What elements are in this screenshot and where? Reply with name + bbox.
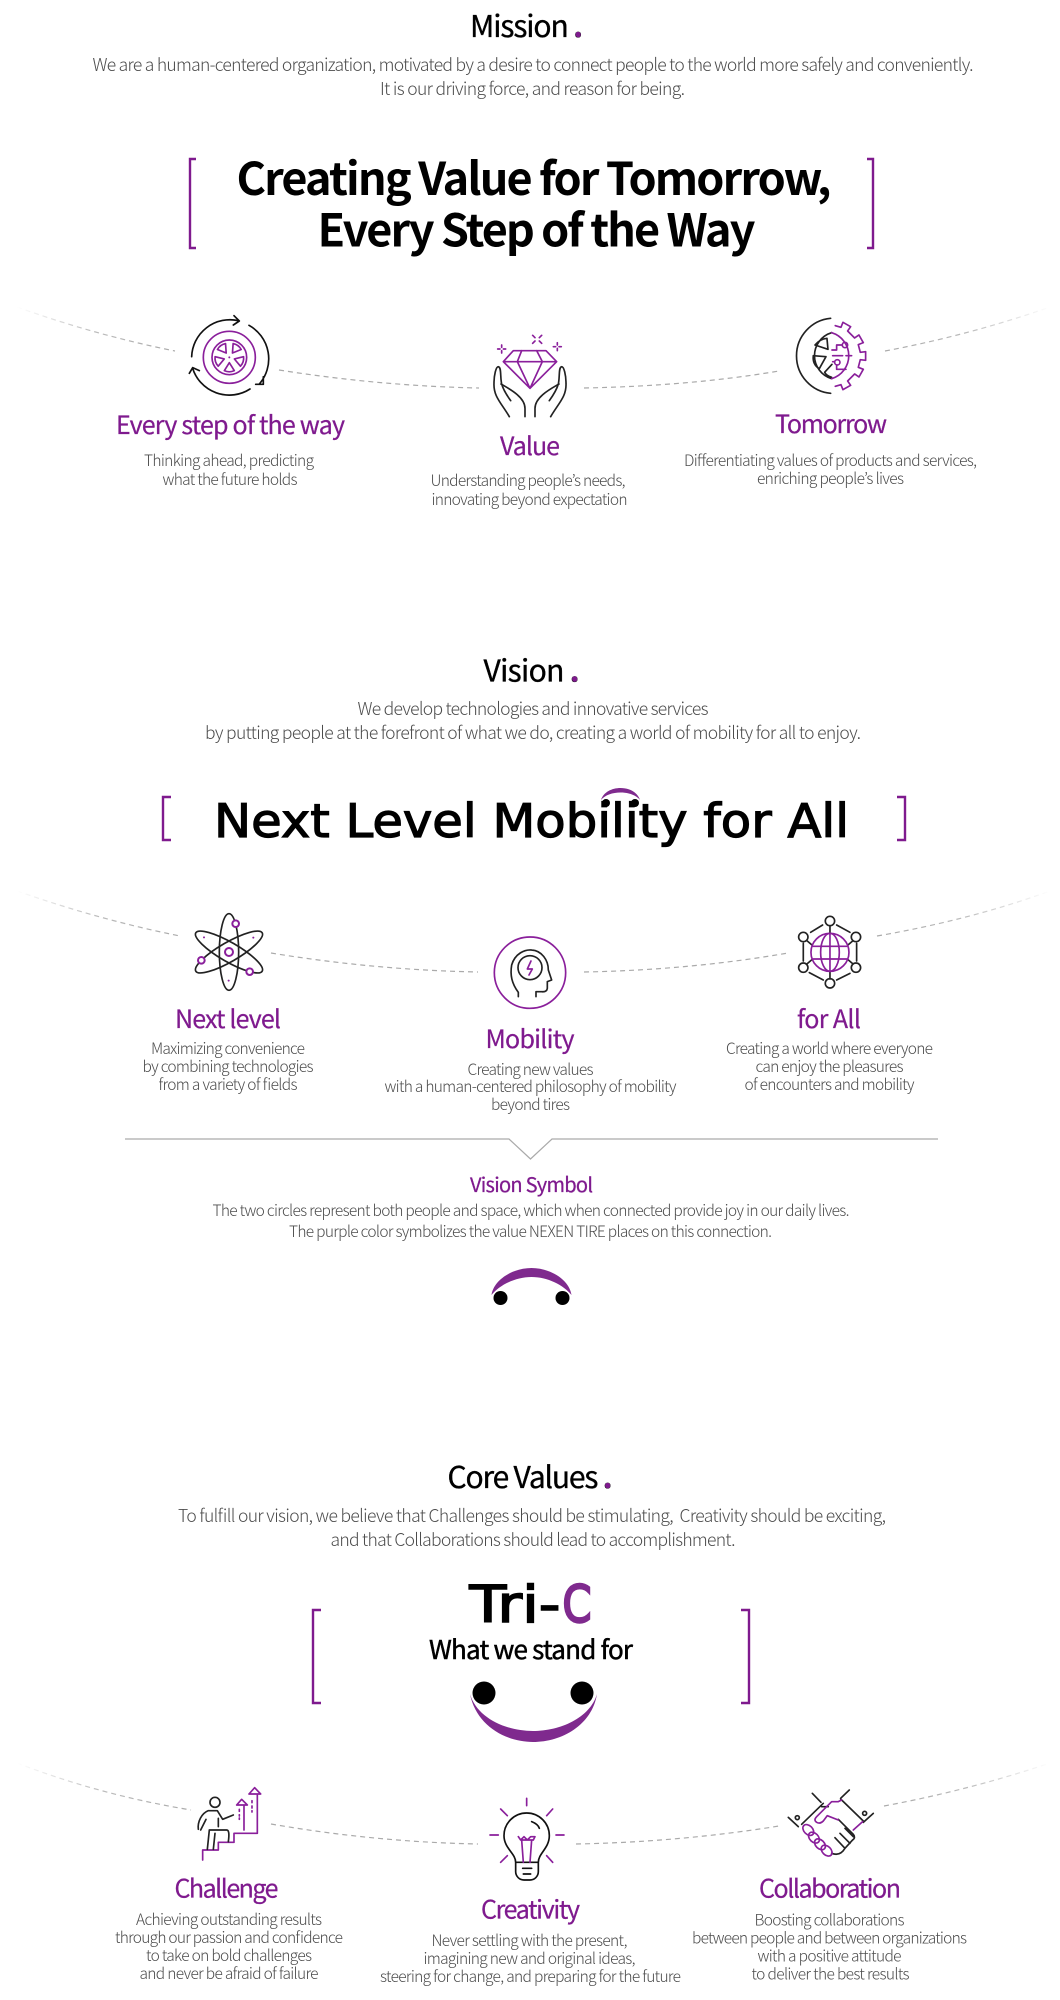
label: challenge: to take on bold challenges — [146, 1944, 312, 1966]
label: challenge — [115, 1870, 343, 1984]
label: challenge: Challenge — [174, 1870, 278, 1906]
bracket: right — [741, 1610, 749, 1703]
bracket: right — [897, 797, 905, 840]
label: tomorrow: Differentiating values of products and services, — [684, 449, 977, 471]
label: value — [430, 427, 628, 510]
label: creativity: steering for change, and preparing for the future — [380, 1965, 681, 1987]
smile symbol — [470, 1682, 597, 1742]
panel: core values — [17, 1453, 1050, 1987]
label: challenge: and never be afraid of failure — [140, 1962, 318, 1984]
label: collaboration: to deliver the best results — [752, 1962, 910, 1984]
label: collaboration: Collaboration — [759, 1870, 901, 1906]
vision statement text — [205, 696, 861, 745]
mission slogan — [236, 143, 832, 260]
label: challenge: through our passion and confidence — [115, 1926, 343, 1948]
label: creativity: Creativity — [481, 1890, 580, 1926]
label: mobility: with a human-centered philosophy of mobility — [384, 1075, 677, 1097]
label: tomorrow: Tomorrow — [775, 405, 887, 441]
icon: light bulb — [490, 1798, 564, 1880]
label: collaboration: between people and between organizations — [692, 1926, 967, 1948]
label: every step of the way: what the future holds — [162, 468, 298, 490]
label: mobility: Mobility — [486, 1020, 574, 1056]
subtitle: what we stand for: What we stand for — [429, 1630, 634, 1667]
label: mobility: beyond tires — [491, 1093, 570, 1115]
bracket: right — [867, 159, 873, 248]
label: collaboration: with a positive attitude — [758, 1944, 902, 1966]
panel: vision — [17, 646, 1050, 1305]
heading: mission: Mission . — [470, 2, 583, 46]
vision symbol text: The two circles represent both people and space, which when connected provide joy in our daily lives. — [212, 1199, 850, 1221]
icon: person climbing stairs — [198, 1788, 261, 1860]
label: collaboration — [692, 1870, 967, 1984]
vision symbol heading: Vision Symbol — [470, 1169, 593, 1198]
Tri-C logo: Tri- — [468, 1576, 560, 1635]
Tri-C logo: C — [562, 1576, 592, 1635]
label: every step of the way: Every step of the way — [116, 406, 345, 442]
icon: tire and gear — [797, 318, 866, 393]
label: every step of the way — [116, 406, 345, 490]
Tri-C logo — [468, 1576, 592, 1635]
vision slogan with symbol: Next Level Mobility for All — [214, 794, 849, 848]
icon: tire with cycle arrows — [189, 316, 269, 395]
core values statement text — [178, 1503, 886, 1552]
bracket: left — [313, 1610, 321, 1703]
label: mobility — [384, 1020, 677, 1115]
icon: globe network — [799, 916, 861, 988]
icon: atom — [191, 914, 267, 990]
label: next level: Next level — [175, 1000, 281, 1036]
icon: head with lightning bolt — [494, 937, 566, 1008]
heading: vision: Vision . — [484, 646, 580, 690]
dashed arc connector — [17, 1763, 1050, 1844]
core values statement text: and that Collaborations should lead to accomplishment. — [330, 1527, 736, 1552]
label: tomorrow: enriching people’s lives — [757, 467, 904, 489]
core values statement text: To fulfill our vision, we believe that Challenges should be stimulating, Creativity should be exciting, — [178, 1503, 886, 1528]
label: tomorrow — [684, 405, 977, 489]
label: next level: Maximizing convenience — [151, 1037, 305, 1059]
label: collaboration: Boosting collaborations — [754, 1908, 904, 1930]
mission slogan: Every Step of the Way — [318, 194, 756, 260]
label: for all: of encounters and mobility — [744, 1073, 915, 1095]
label: value: Understanding people’s needs, — [430, 469, 626, 491]
icon: handshake — [788, 1790, 873, 1858]
label: next level: from a variety of fields — [158, 1073, 298, 1095]
label: creativity: imagining new and original ideas, — [424, 1947, 636, 1969]
vision statement text: We develop technologies and innovative services — [358, 696, 709, 721]
mission statement text: We are a human-centered organization, motivated by a desire to connect people to the world more safely and conveniently. — [92, 52, 974, 77]
label: creativity — [380, 1890, 681, 1987]
label: for all: for All — [797, 1000, 861, 1036]
bracket: left — [163, 797, 171, 840]
label: for all — [726, 1000, 933, 1095]
panel: mission — [17, 2, 1050, 510]
label: challenge: Achieving outstanding results — [136, 1908, 322, 1930]
mission slogan: Creating Value for Tomorrow, — [236, 143, 832, 208]
bracket: left — [190, 159, 196, 248]
icon: diamond in hands — [494, 335, 566, 417]
label: next level — [142, 1000, 314, 1095]
label: value: innovating beyond expectation — [432, 488, 628, 510]
mission statement text — [92, 52, 974, 101]
vision symbol graphic — [492, 1268, 572, 1305]
label: mobility: Creating new values — [468, 1058, 594, 1080]
dashed arc connector — [17, 307, 1050, 388]
label: for all: Creating a world where everyone — [726, 1037, 933, 1059]
divider with notch — [125, 1139, 938, 1159]
vision symbol text — [212, 1199, 850, 1242]
dashed arc connector — [17, 891, 1050, 972]
vision symbol text: The purple color symbolizes the value NEXEN TIRE places on this connection. — [289, 1220, 772, 1242]
mission statement text: It is our driving force, and reason for being. — [380, 76, 685, 101]
label: for all: can enjoy the pleasures — [756, 1055, 904, 1077]
label: creativity: Never settling with the present, — [432, 1929, 628, 1951]
label: next level: by combining technologies — [142, 1055, 314, 1077]
vision statement text: by putting people at the forefront of what we do, creating a world of mobility for all to enjoy. — [205, 720, 861, 745]
label: value: Value — [500, 427, 560, 463]
label: every step of the way: Thinking ahead, predicting — [144, 449, 315, 471]
heading: core values: Core Values . — [448, 1453, 612, 1497]
